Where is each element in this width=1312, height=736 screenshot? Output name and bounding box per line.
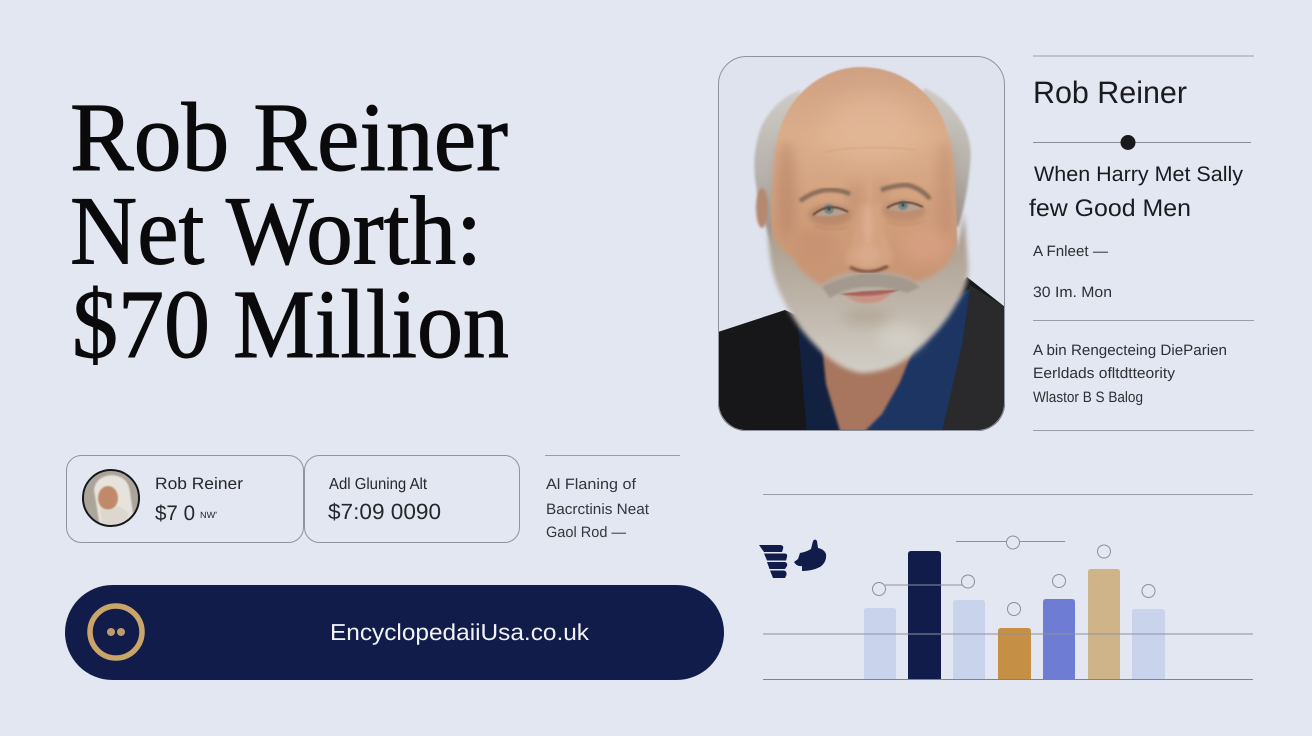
neck bbox=[822, 345, 915, 431]
text block: side note: Al Flaning of bbox=[546, 476, 637, 493]
beard bbox=[768, 212, 968, 373]
profile name: Rob Reiner bbox=[155, 475, 244, 493]
text block: description: A bin Rengecteing DieParien bbox=[1033, 342, 1227, 359]
brows bbox=[800, 190, 850, 201]
portrait photo bbox=[718, 56, 1005, 431]
title: Net Worth: bbox=[70, 178, 482, 286]
eyes bbox=[814, 208, 848, 216]
text block: side note: Gaol Rod — bbox=[546, 524, 626, 541]
profile value bbox=[155, 502, 217, 525]
ears bbox=[756, 188, 768, 228]
mouth bbox=[840, 290, 899, 297]
hair bbox=[754, 90, 800, 245]
title bbox=[70, 84, 509, 379]
title: Rob Reiner bbox=[70, 84, 508, 192]
icon: stacked lines bbox=[759, 545, 787, 578]
bar chart bbox=[763, 494, 1253, 680]
forehead wrinkles bbox=[825, 147, 915, 152]
website text: EncyclopedaiiUsa.co.uk bbox=[330, 619, 590, 645]
value card amount: $7:09 0090 bbox=[328, 499, 441, 524]
text block: description: Eerldads ofltdtteority bbox=[1033, 365, 1176, 382]
divider with dot bbox=[1033, 135, 1251, 150]
banner: website bbox=[65, 585, 724, 680]
icon: thumbs up bbox=[794, 540, 826, 571]
forehead highlight bbox=[834, 100, 910, 154]
mustache bbox=[822, 273, 920, 298]
marker lines bbox=[885, 542, 1065, 585]
icon: gold ring bbox=[90, 606, 142, 658]
bars bbox=[864, 551, 1165, 679]
panel: profile card bbox=[66, 456, 304, 542]
eye sockets bbox=[808, 204, 852, 226]
detail one: A Fnleet — bbox=[1033, 243, 1108, 260]
nose bbox=[848, 235, 890, 268]
markers bbox=[872, 536, 1155, 616]
profile value: NW' bbox=[200, 510, 217, 520]
name heading: Rob Reiner bbox=[1033, 75, 1187, 110]
face bbox=[770, 66, 958, 288]
film title one: When Harry Met Sally bbox=[1034, 163, 1244, 186]
text block: side note bbox=[545, 456, 680, 541]
cheeks bbox=[912, 236, 940, 256]
icon: avatar portrait bbox=[82, 469, 140, 527]
title: $70 Million bbox=[72, 271, 509, 379]
profile value: $7 0 bbox=[155, 502, 195, 525]
text block: description: Wlastor B S Balog bbox=[1033, 389, 1143, 406]
film title two: few Good Men bbox=[1029, 195, 1191, 222]
detail two: 30 Im. Mon bbox=[1033, 284, 1112, 301]
jacket bbox=[718, 277, 1005, 431]
panel: right info column bbox=[1029, 56, 1254, 430]
under eye lines bbox=[815, 226, 848, 230]
value card label: Adl Gluning Alt bbox=[329, 476, 428, 493]
text block: description bbox=[1033, 342, 1227, 406]
shirt bbox=[798, 288, 970, 431]
side shading bbox=[776, 140, 796, 240]
panel: value card bbox=[304, 456, 520, 542]
text block: side note: Bacrctinis Neat bbox=[546, 501, 650, 518]
